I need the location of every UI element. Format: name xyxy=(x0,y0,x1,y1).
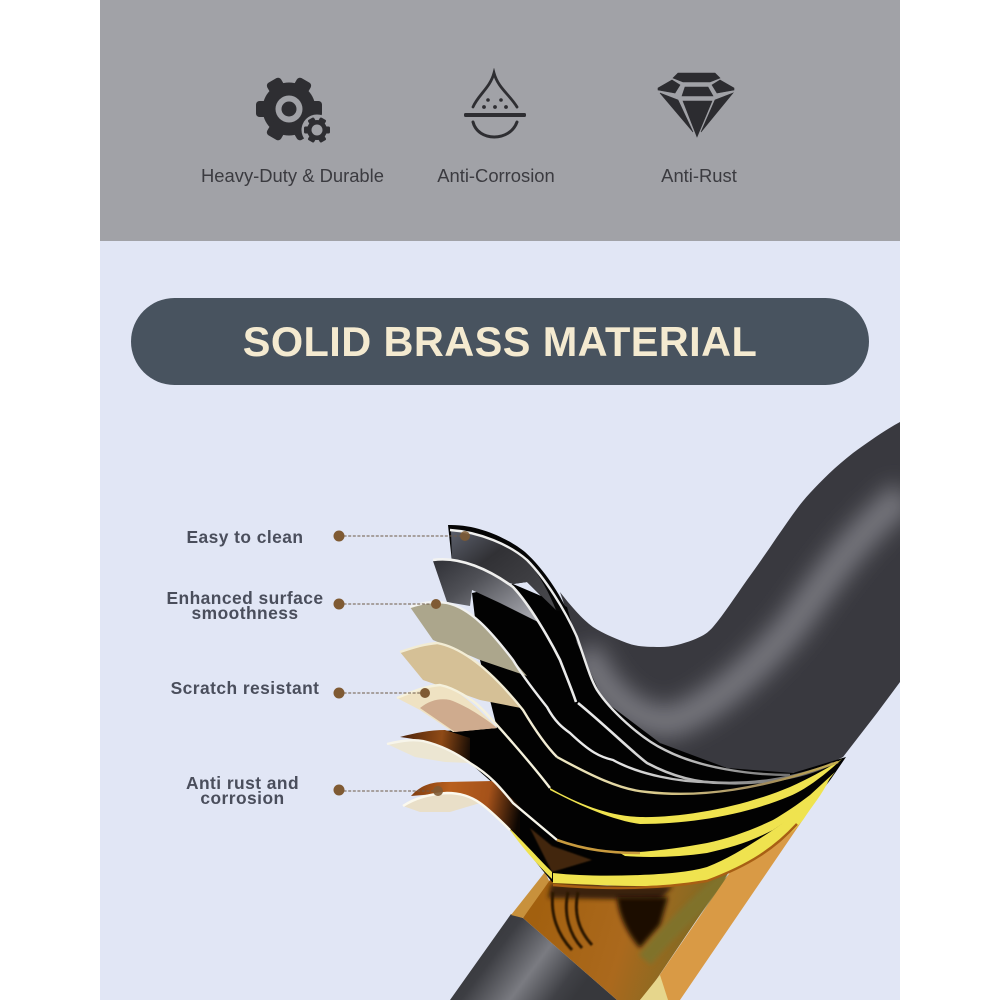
faucet lower tube xyxy=(450,914,617,1000)
highlight line C xyxy=(410,602,838,783)
text: anti-corrosion label: Anti-Corrosion xyxy=(437,165,555,186)
callout: scratch resistant leader xyxy=(334,688,430,698)
brown patch above bottom band xyxy=(530,828,592,872)
text: heavy-duty label: Heavy-Duty & Durable xyxy=(201,165,384,186)
layer 3 pad beige xyxy=(410,602,527,676)
icon: water drop xyxy=(464,68,526,138)
icon: gears xyxy=(256,78,330,142)
layer 7 tip orange xyxy=(411,781,520,838)
layer 2 pad grey xyxy=(433,560,538,622)
yellow bands xyxy=(508,759,842,886)
text: enhanced surface smoothness: Enhanced surface xyxy=(166,588,324,608)
heading pill: solid brass material: SOLID BRASS MATERIAL xyxy=(243,318,757,365)
text: enhanced surface smoothness xyxy=(166,588,324,623)
callout: surface smoothness leader xyxy=(334,598,441,610)
highlight line A xyxy=(450,530,790,775)
black layered mass xyxy=(443,584,846,882)
layer 1 pad dark xyxy=(448,525,568,612)
highlight line G xyxy=(403,793,510,830)
faucet upper body xyxy=(560,422,900,773)
illustration: faucet cutaway layers xyxy=(334,422,900,1000)
text: easy to clean: Easy to clean xyxy=(186,527,304,547)
highlight line F xyxy=(387,740,557,840)
layer 7 tip cream xyxy=(403,793,480,812)
icon: diamond xyxy=(658,72,734,138)
text: enhanced surface smoothness: smoothness xyxy=(192,603,298,623)
highlight line B xyxy=(433,559,833,783)
layer 6 tip orange xyxy=(400,730,470,763)
highlight line D xyxy=(400,643,557,757)
text: anti-rust label: Anti-Rust xyxy=(661,165,737,186)
text: anti rust and corrosion: Anti rust and xyxy=(186,773,299,793)
panel: top features band xyxy=(100,0,900,241)
callout: easy to clean leader xyxy=(334,530,470,542)
text: anti rust and corrosion xyxy=(186,773,299,808)
panel: light material background xyxy=(100,241,900,1000)
brass core xyxy=(511,821,802,1000)
text: scratch resistant: Scratch resistant xyxy=(171,678,319,698)
layer 4 pad tan xyxy=(400,643,521,708)
highlight line E xyxy=(397,685,550,788)
text: anti rust and corrosion: corrosion xyxy=(200,788,285,808)
heading pill: solid brass material xyxy=(131,298,869,385)
layer 5 pad cream xyxy=(397,685,497,732)
layer 6 tip cream xyxy=(389,742,468,763)
brown band under yellow xyxy=(553,824,797,888)
layer 5 pad peach xyxy=(420,699,497,732)
callout: anti rust leader xyxy=(334,784,443,796)
